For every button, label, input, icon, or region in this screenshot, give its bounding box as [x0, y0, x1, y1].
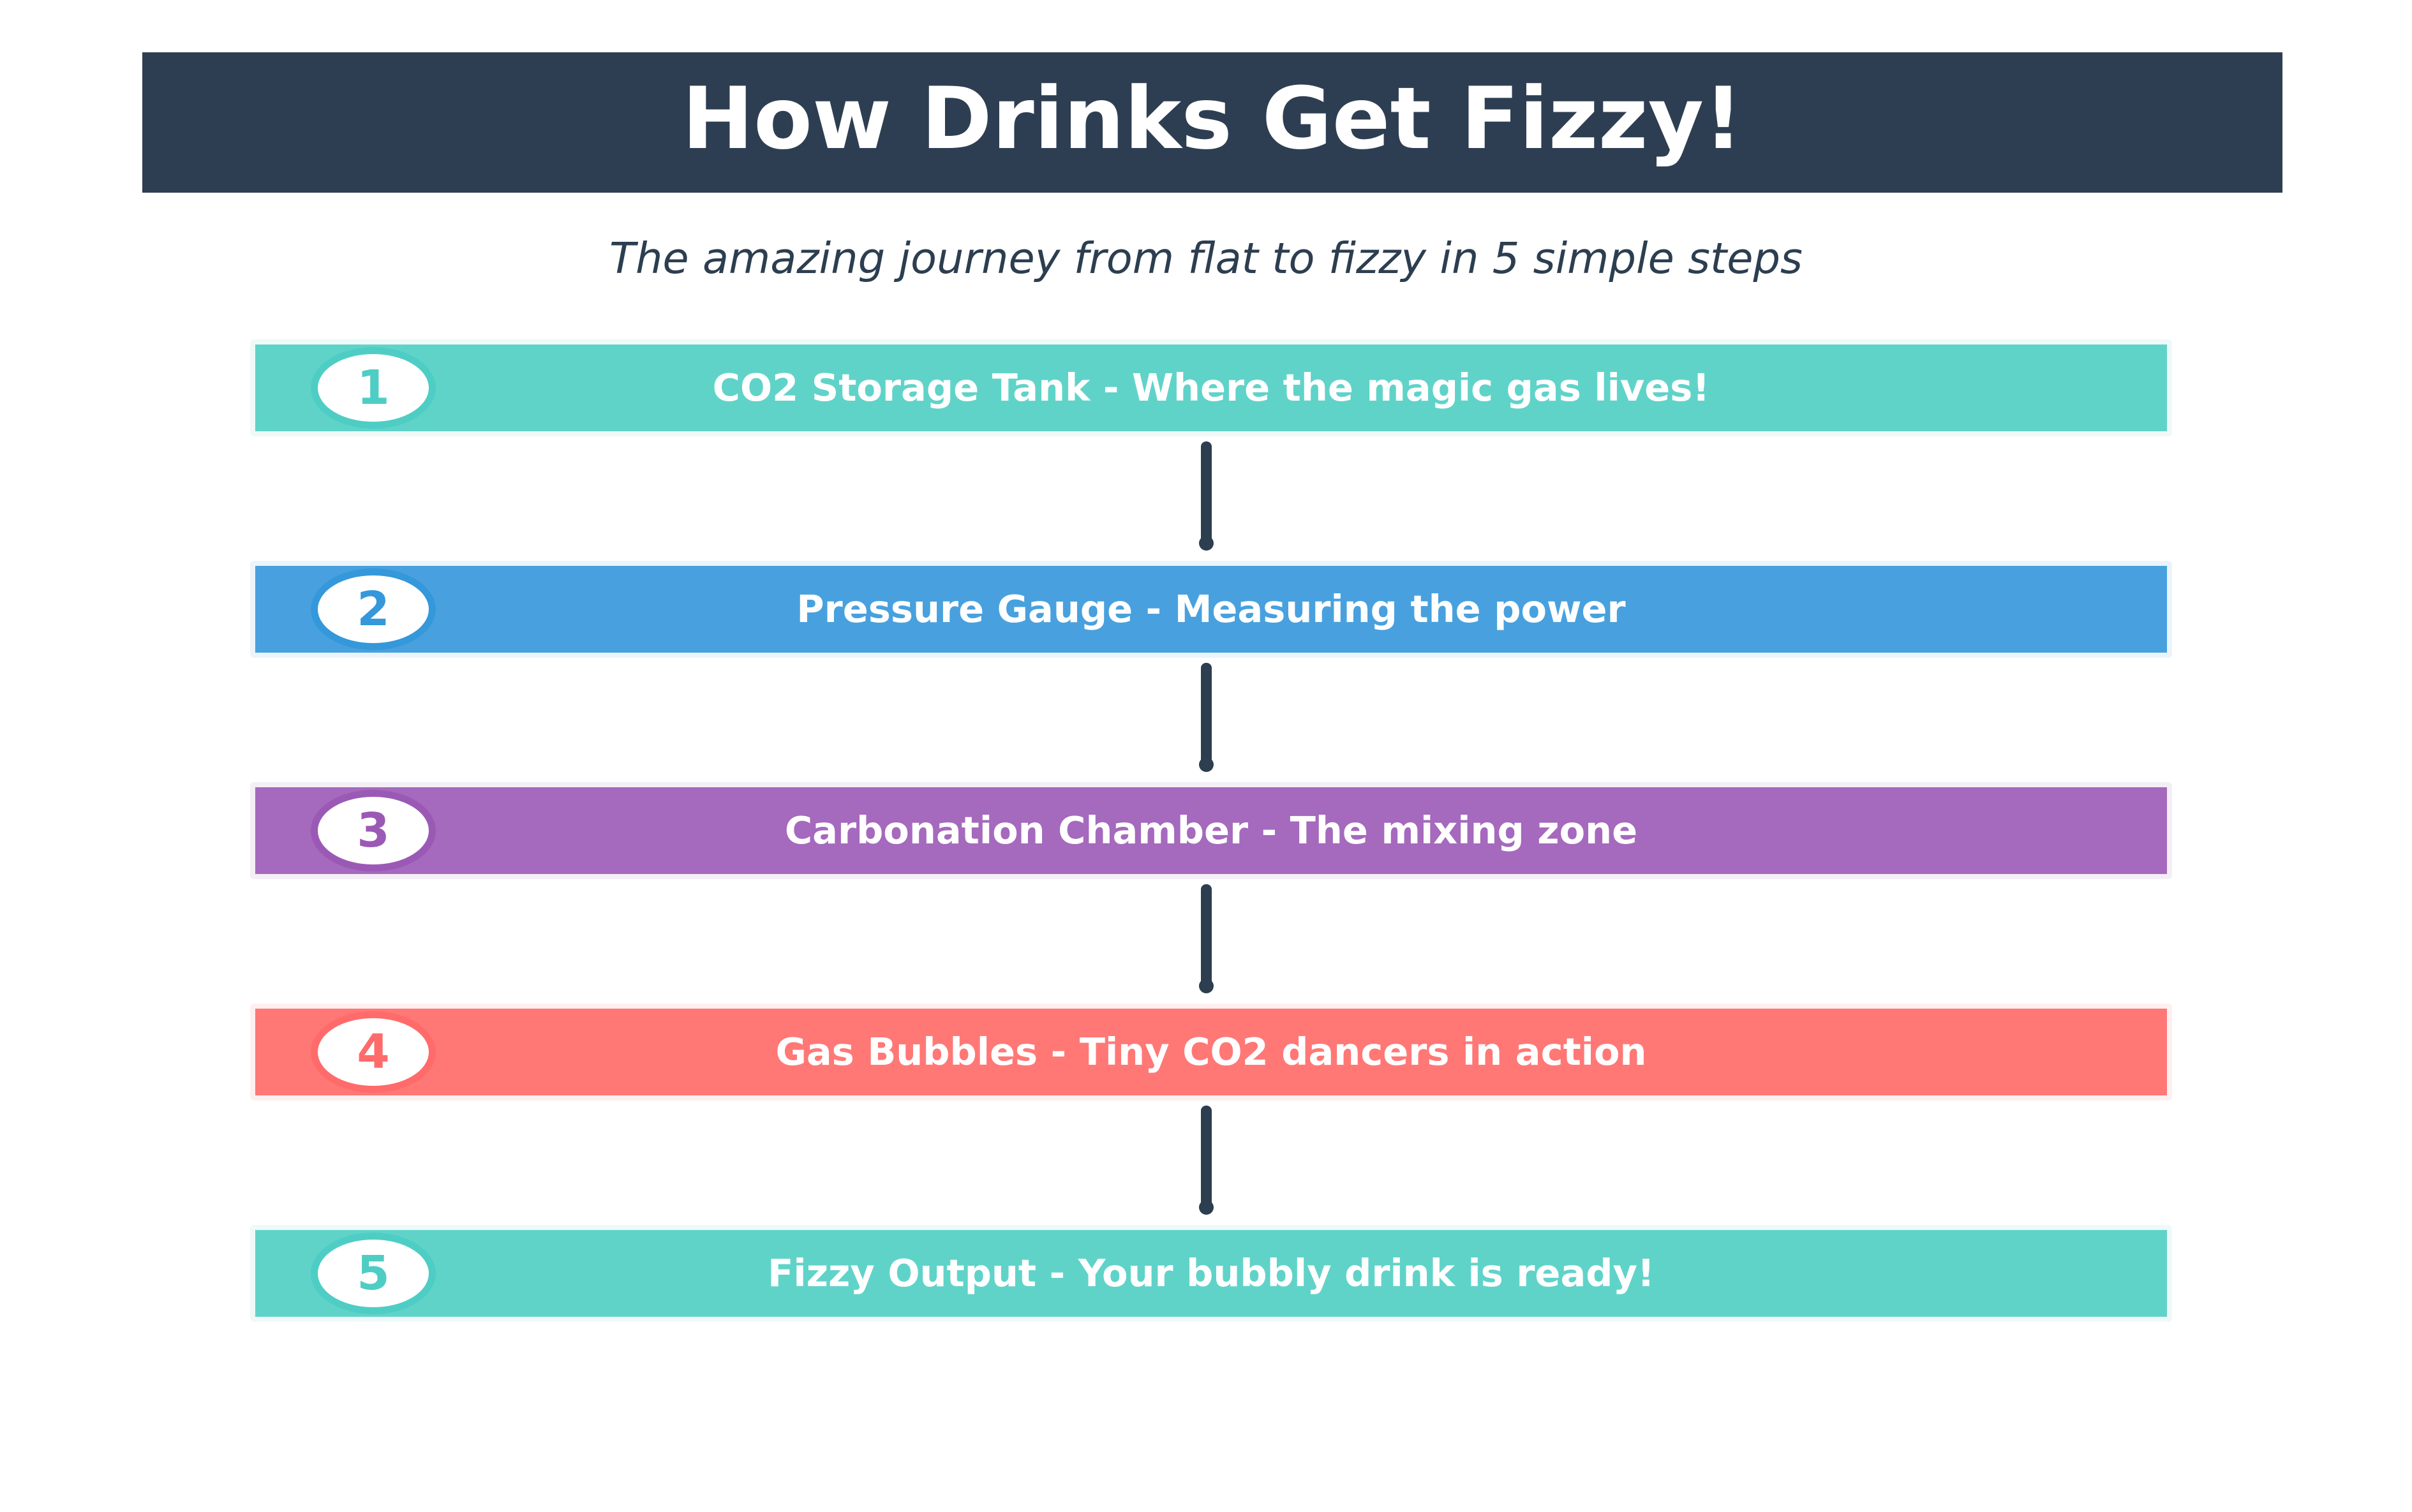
step 1 [250, 339, 2172, 436]
badge 4: 4 [357, 1025, 390, 1079]
title [142, 52, 2282, 193]
step 5 [250, 1225, 2172, 1322]
step 4: Gas Bubbles - Tiny CO2 dancers in action [775, 1030, 1647, 1074]
step 4 [250, 1004, 2172, 1101]
step 3 [250, 782, 2172, 879]
step 3: Carbonation Chamber - The mixing zone [785, 808, 1637, 852]
badge 2 [311, 568, 436, 650]
arrow 3 [1201, 884, 1212, 991]
badge 1: 1 [357, 360, 390, 415]
badge 5: 5 [357, 1246, 390, 1301]
title: How Drinks Get Fizzy! [682, 69, 1743, 168]
arrow 2 [1201, 663, 1212, 769]
badge 1 [311, 347, 436, 429]
subtitle: The amazing journey from flat to fizzy in 5 simple steps [609, 233, 1803, 283]
step 2: Pressure Gauge - Measuring the power [796, 587, 1626, 631]
step 5: Fizzy Output - Your bubbly drink is ready! [768, 1251, 1655, 1295]
badge 3 [311, 790, 436, 871]
arrow 4 [1201, 1106, 1212, 1212]
badge 4 [311, 1011, 436, 1093]
badge 3: 3 [357, 803, 390, 858]
badge 5 [311, 1233, 436, 1314]
step 2 [250, 561, 2172, 658]
arrow 1 [1201, 441, 1212, 548]
step 1: CO2 Storage Tank - Where the magic gas lives! [713, 366, 1709, 410]
badge 2: 2 [357, 582, 390, 637]
